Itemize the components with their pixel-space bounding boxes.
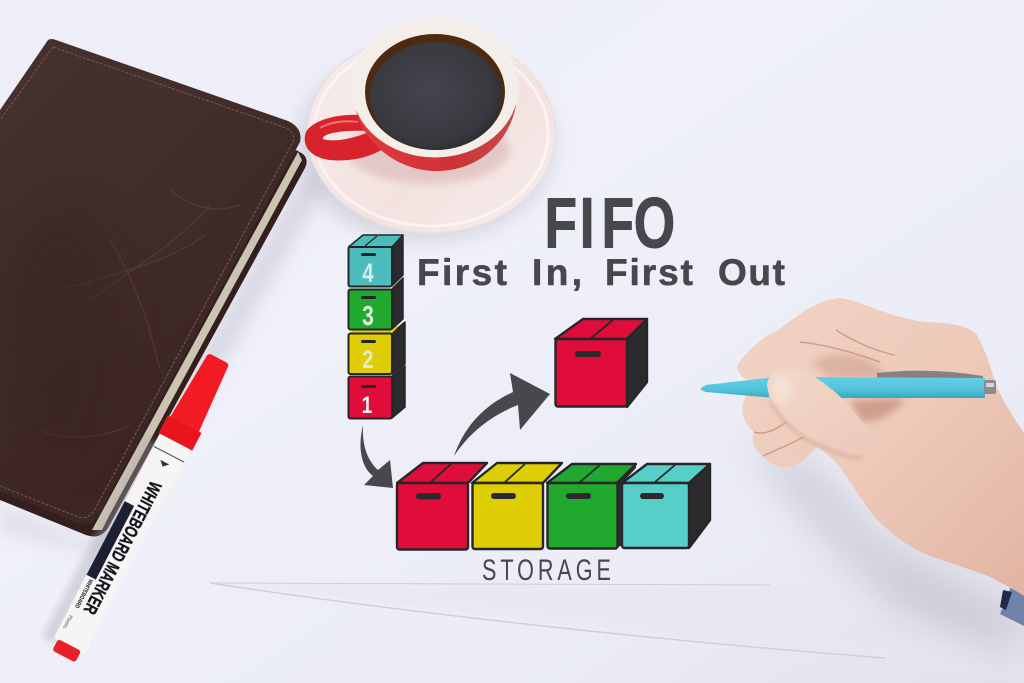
arrow: storage to out — [454, 373, 550, 456]
subtitle: Out — [718, 252, 785, 293]
coffee crema ring — [365, 34, 505, 150]
marker shadow — [42, 438, 158, 644]
box 1: 1 — [362, 391, 372, 419]
marker body — [54, 434, 191, 654]
pen — [701, 377, 996, 398]
saucer — [308, 33, 556, 233]
notebook — [0, 39, 307, 536]
notebook back cover — [0, 150, 307, 536]
subtitle: First — [417, 252, 507, 293]
storage box red — [397, 463, 487, 550]
marker: Plastic — [61, 614, 73, 630]
outgoing red box — [555, 319, 647, 407]
marker — [39, 346, 236, 665]
box 1 — [348, 366, 405, 419]
subtitle — [417, 252, 785, 293]
marker cap — [159, 350, 236, 451]
title: FIFO — [545, 184, 675, 263]
cup rim — [352, 16, 518, 158]
subtitle: In, — [532, 252, 582, 293]
storage label: STORAGE — [482, 552, 611, 587]
coffee cup and saucer — [305, 16, 556, 233]
marker tip — [52, 639, 81, 662]
arrow: stack to storage — [360, 425, 393, 488]
notebook pages edge — [92, 152, 302, 530]
stacked boxes — [348, 235, 405, 419]
box 3: 3 — [362, 301, 374, 332]
marker: WHITEBOARD — [73, 578, 93, 609]
notebook leather cover — [0, 39, 300, 524]
coffee surface — [370, 42, 502, 150]
thumb — [767, 369, 885, 458]
subtitle: First — [605, 252, 693, 293]
box 4: 4 — [362, 258, 374, 289]
cup body — [356, 105, 516, 171]
marker label: WHITEBOARD MARKER — [80, 478, 165, 618]
pen clip — [877, 371, 983, 379]
storage boxes — [397, 463, 710, 550]
cup handle — [305, 115, 381, 160]
notebook lower shade — [0, 210, 120, 470]
box 2: 2 — [362, 346, 374, 374]
hand holding pen — [701, 298, 1024, 626]
storage box green — [547, 464, 636, 548]
box 2 — [348, 322, 405, 374]
box 4 — [348, 235, 403, 289]
notebook stitching — [0, 47, 294, 518]
paper sheet — [210, 583, 1024, 683]
box 3 — [348, 278, 403, 332]
finger creases — [754, 330, 895, 456]
notebook leather creases — [40, 190, 240, 437]
storage box yellow — [472, 463, 562, 549]
storage box teal — [622, 464, 710, 548]
shirt sleeve — [1000, 574, 1024, 626]
hand back and fingers — [737, 298, 1024, 596]
